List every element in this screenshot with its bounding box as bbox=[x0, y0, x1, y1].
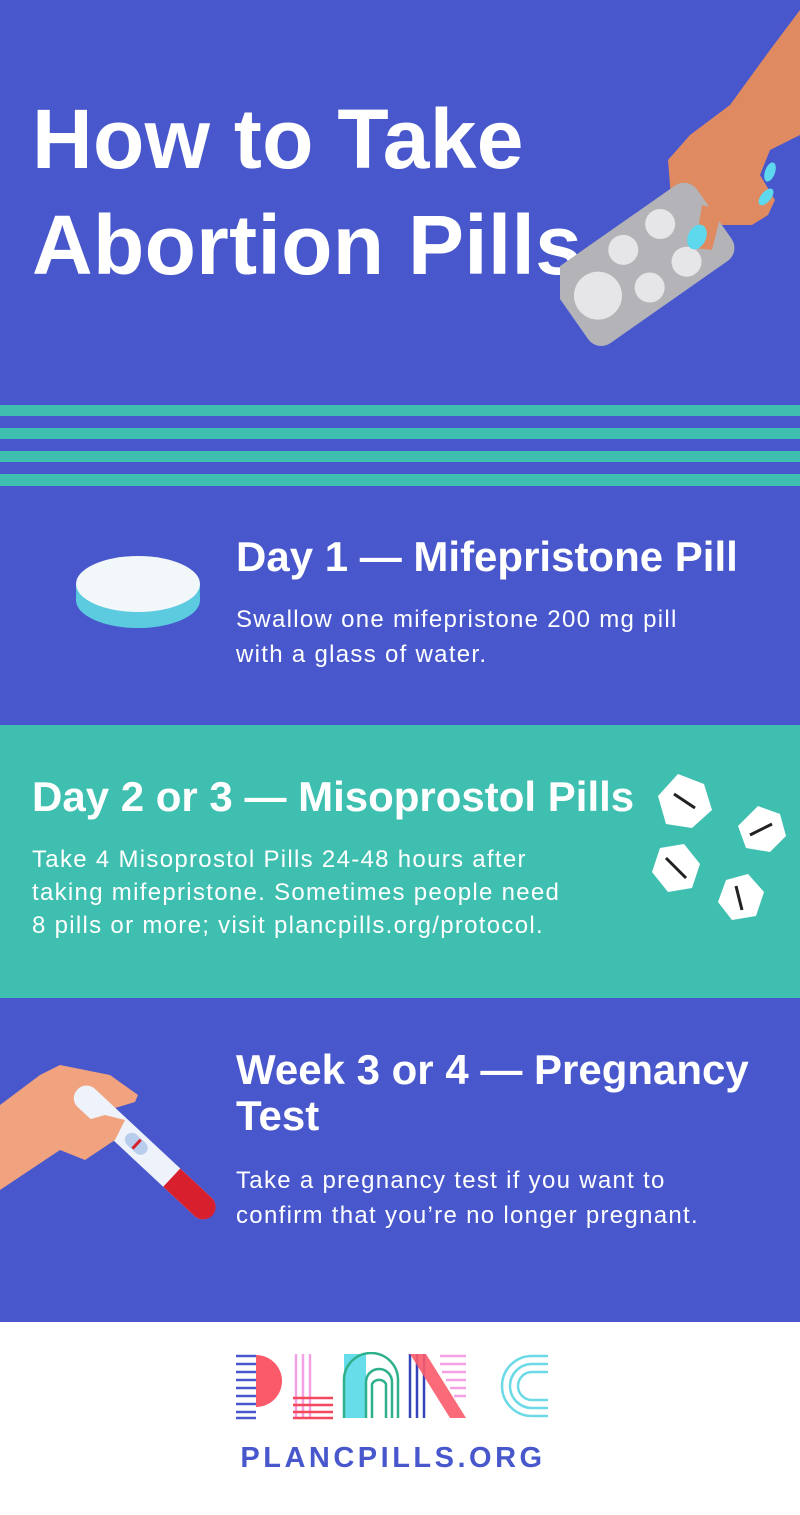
illustration: hand with pregnancy test bbox=[0, 1065, 216, 1220]
heading: day 2 or 3: Day 2 or 3 — Misoprostol Pills bbox=[32, 773, 634, 820]
logo: PLAN C bbox=[236, 1352, 548, 1420]
text: day 1: with a glass of water. bbox=[236, 641, 487, 668]
icon: mifepristone pill bbox=[76, 556, 200, 628]
text: day 1 bbox=[236, 606, 678, 668]
text: day 2 or 3: taking mifepristone. Sometimes people need bbox=[32, 879, 560, 906]
heading: week 3 or 4: Test bbox=[236, 1092, 319, 1139]
stripes bbox=[0, 405, 800, 486]
footer bbox=[0, 1322, 800, 1515]
heading: week 3 or 4: Week 3 or 4 — Pregnancy bbox=[236, 1046, 749, 1093]
heading: day 1: Day 1 — Mifepristone Pill bbox=[236, 533, 738, 580]
text: day 2 or 3 bbox=[32, 846, 560, 939]
illustration: hand holding blister pack bbox=[560, 10, 800, 346]
text: week 3 or 4: confirm that you’re no longer pregnant. bbox=[236, 1202, 699, 1229]
text: week 3 or 4 bbox=[236, 1167, 699, 1229]
text: day 2 or 3: 8 pills or more; visit plancpills.org/protocol. bbox=[32, 912, 544, 939]
footer url: PLANCPILLS.ORG bbox=[240, 1442, 546, 1474]
title: Abortion Pills bbox=[32, 198, 582, 292]
text: day 1: Swallow one mifepristone 200 mg pill bbox=[236, 606, 678, 633]
title bbox=[32, 92, 582, 292]
text: day 2 or 3: Take 4 Misoprostol Pills 24-48 hours after bbox=[32, 846, 527, 873]
heading: week 3 or 4 bbox=[236, 1046, 749, 1139]
text: week 3 or 4: Take a pregnancy test if you want to bbox=[236, 1167, 666, 1194]
title: How to Take bbox=[32, 92, 524, 186]
panel: day 2 or 3 bbox=[0, 725, 800, 998]
icon: misoprostol pills bbox=[652, 774, 786, 920]
